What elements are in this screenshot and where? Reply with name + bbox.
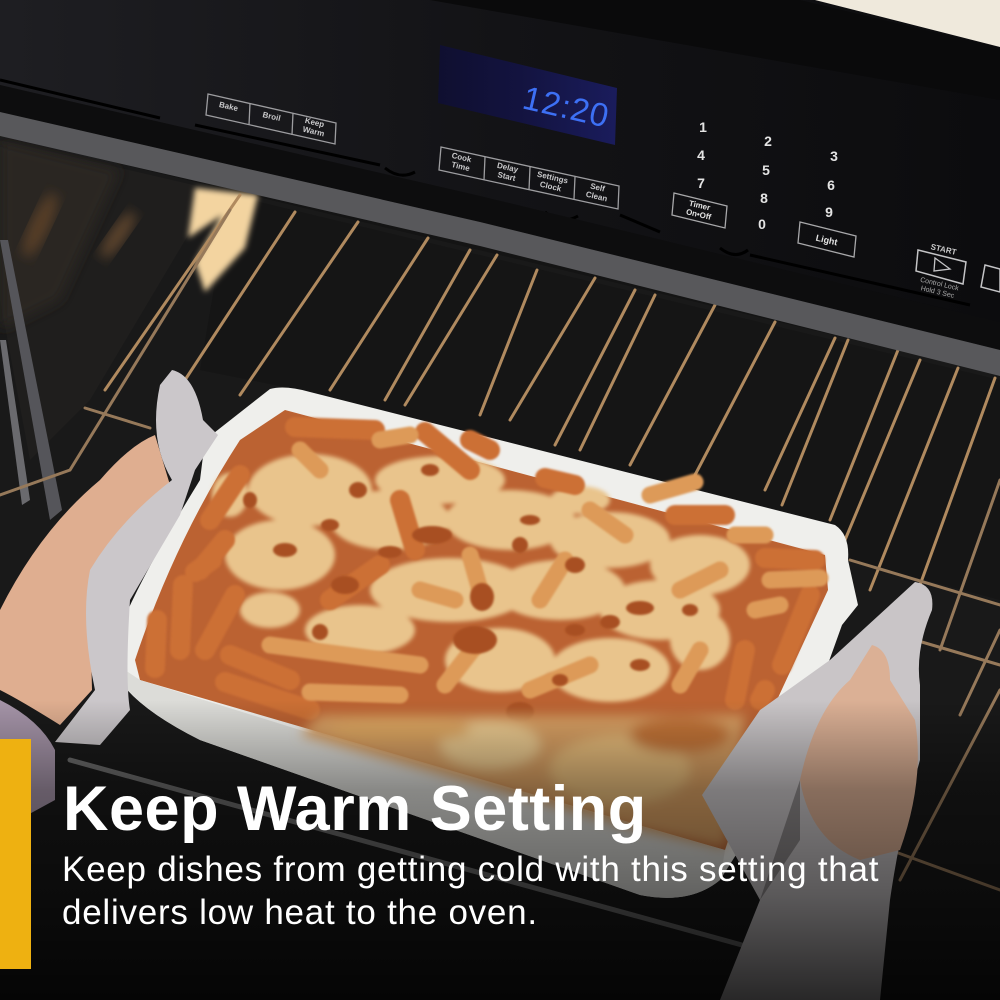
buttons: bake, broil, keep warm (206, 94, 336, 144)
title: Keep Warm Setting (63, 774, 647, 844)
door gasket (0, 85, 1000, 376)
keypad: 2 (764, 133, 772, 149)
bottom shade (0, 700, 1000, 1000)
buttons: cook time, delay start, settings clock, self clean: Clean (585, 190, 608, 203)
body text: Keep dishes from getting cold with this setting that (62, 850, 879, 889)
keypad: 4 (697, 147, 705, 163)
body text (62, 850, 879, 932)
left hand and towel (0, 370, 218, 830)
keypad: On•Off (685, 207, 712, 222)
blurred foreground pasta (300, 715, 745, 848)
start button: Hold 3 Sec (920, 285, 955, 300)
buttons: cook time, delay start, settings clock, self clean: Delay (496, 161, 520, 174)
oven light glow (16, 188, 258, 292)
keypad: 3 (830, 148, 838, 164)
keypad: 7 (697, 175, 705, 191)
buttons: bake, broil, keep warm: Broil (262, 110, 281, 123)
accent bar (0, 739, 31, 969)
keypad: 8 (760, 190, 768, 206)
buttons: bake, broil, keep warm: Warm (302, 125, 325, 138)
buttons: bake, broil, keep warm: Bake (218, 100, 239, 113)
keypad: 0 (758, 216, 766, 232)
buttons: cook time, delay start, settings clock, self clean: Settings (536, 170, 569, 186)
control panel (0, 0, 1000, 345)
door hinges (0, 80, 970, 305)
panel top trim (430, 0, 1000, 100)
start button: START (930, 242, 957, 257)
wall corner (815, 0, 1000, 47)
keypad: 6 (827, 177, 835, 193)
keypad: Light (815, 233, 839, 247)
melted cheese (212, 454, 750, 702)
buttons: cook time, delay start, settings clock, self clean: Cook (451, 151, 473, 164)
pasta tubes (155, 427, 820, 710)
start button: Control Lock (919, 277, 960, 292)
buttons: cook time, delay start, settings clock, self clean (439, 147, 619, 209)
oven racks (0, 195, 1000, 950)
right hand and towel (702, 582, 932, 1000)
keypad: 5 (762, 162, 770, 178)
buttons: cook time, delay start, settings clock, self clean: Self (589, 182, 606, 194)
buttons: cook time, delay start, settings clock, self clean: Start (497, 170, 517, 183)
display (438, 45, 617, 145)
keypad: 9 (825, 204, 833, 220)
browned spots (243, 464, 698, 722)
display: 12:20 (519, 79, 613, 135)
baking dish (110, 388, 858, 898)
keypad (672, 119, 856, 257)
buttons: cook time, delay start, settings clock, self clean: Clock (539, 180, 563, 194)
buttons: cook time, delay start, settings clock, self clean: Time (451, 160, 471, 173)
keypad: 1 (699, 119, 707, 135)
body text: delivers low heat to the oven. (62, 893, 538, 932)
start button (916, 242, 1000, 300)
buttons: bake, broil, keep warm: Keep (304, 116, 325, 129)
keypad: Timer (688, 199, 711, 212)
baked ziti (155, 427, 820, 722)
